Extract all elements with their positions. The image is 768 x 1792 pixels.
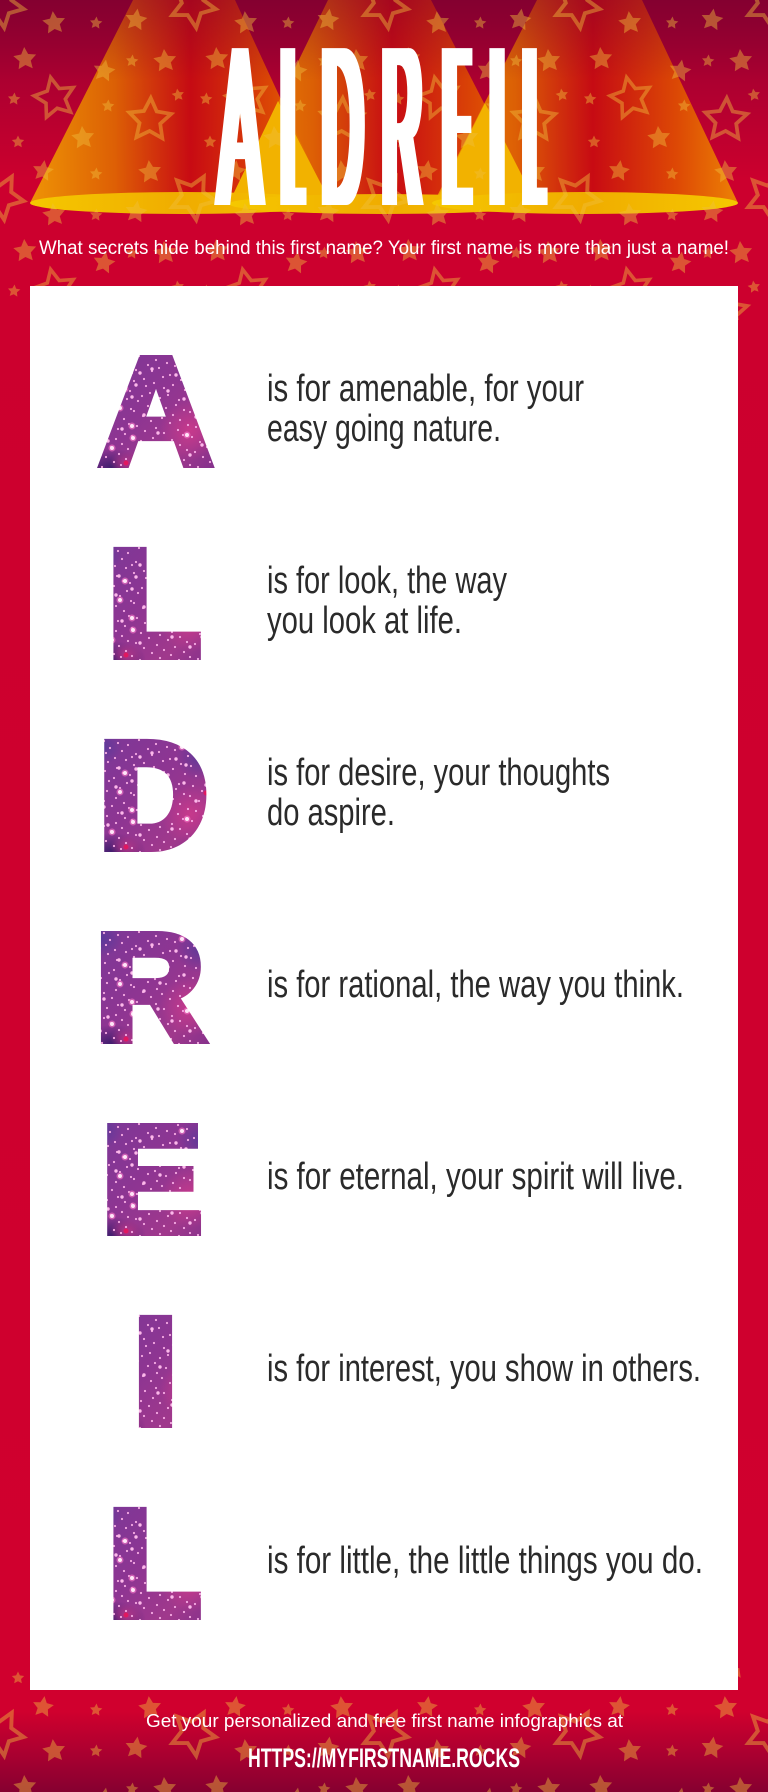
text: A meaning (267, 368, 584, 450)
row: E (102, 1096, 684, 1264)
letter A: A (99, 327, 213, 497)
letter R: R (96, 903, 204, 1071)
title: E (445, 0, 469, 254)
text: D meaning (267, 752, 610, 834)
row: L (110, 522, 507, 686)
text: A meaning: easy going nature. (267, 408, 501, 450)
footer prompt: Get your personalized and free first name infographics at (146, 1711, 623, 1731)
title: L (284, 0, 302, 254)
text: L meaning: is for look, the way (267, 560, 507, 602)
text: L meaning (267, 560, 507, 642)
star pattern overlay: top band (0, 0, 768, 320)
letter L: L (110, 1482, 199, 1646)
row: L (second) (110, 1482, 703, 1646)
letter D: D (100, 714, 207, 878)
letter L: L (110, 522, 199, 686)
letter I: I (135, 1290, 176, 1454)
top shading over spotlights (0, 0, 768, 80)
spotlight floor pool (30, 192, 738, 214)
row: I (135, 1290, 701, 1454)
letter E: E (102, 1096, 202, 1264)
title: I (492, 0, 502, 254)
row: R (96, 903, 684, 1071)
title: L (526, 0, 543, 254)
text: L meaning: you look at life. (267, 600, 462, 642)
subtitle: What secrets hide behind this first name? Your first name is more than just a name! (39, 238, 729, 259)
text: D meaning: is for desire, your thoughts (267, 752, 610, 794)
title (219, 0, 543, 255)
title: D (322, 0, 363, 254)
title: R (383, 0, 421, 255)
spotlight overlap: left (228, 101, 332, 205)
spotlight overlap: right (434, 103, 537, 205)
spotlight: middle cone (225, 0, 540, 212)
text: D meaning: do aspire. (267, 792, 395, 834)
star pattern overlay: bottom band (0, 1668, 768, 1792)
text: A meaning: is for amenable, for your (267, 368, 584, 410)
title: A (219, 1, 261, 254)
row: A (99, 327, 584, 497)
panel: name acrostic (30, 286, 738, 1690)
footer url: HTTPS://MYFIRSTNAME.ROCKS (248, 1743, 520, 1773)
row: D (100, 714, 610, 878)
spotlight: right cone (429, 0, 738, 212)
spotlight: left cone (30, 0, 333, 212)
